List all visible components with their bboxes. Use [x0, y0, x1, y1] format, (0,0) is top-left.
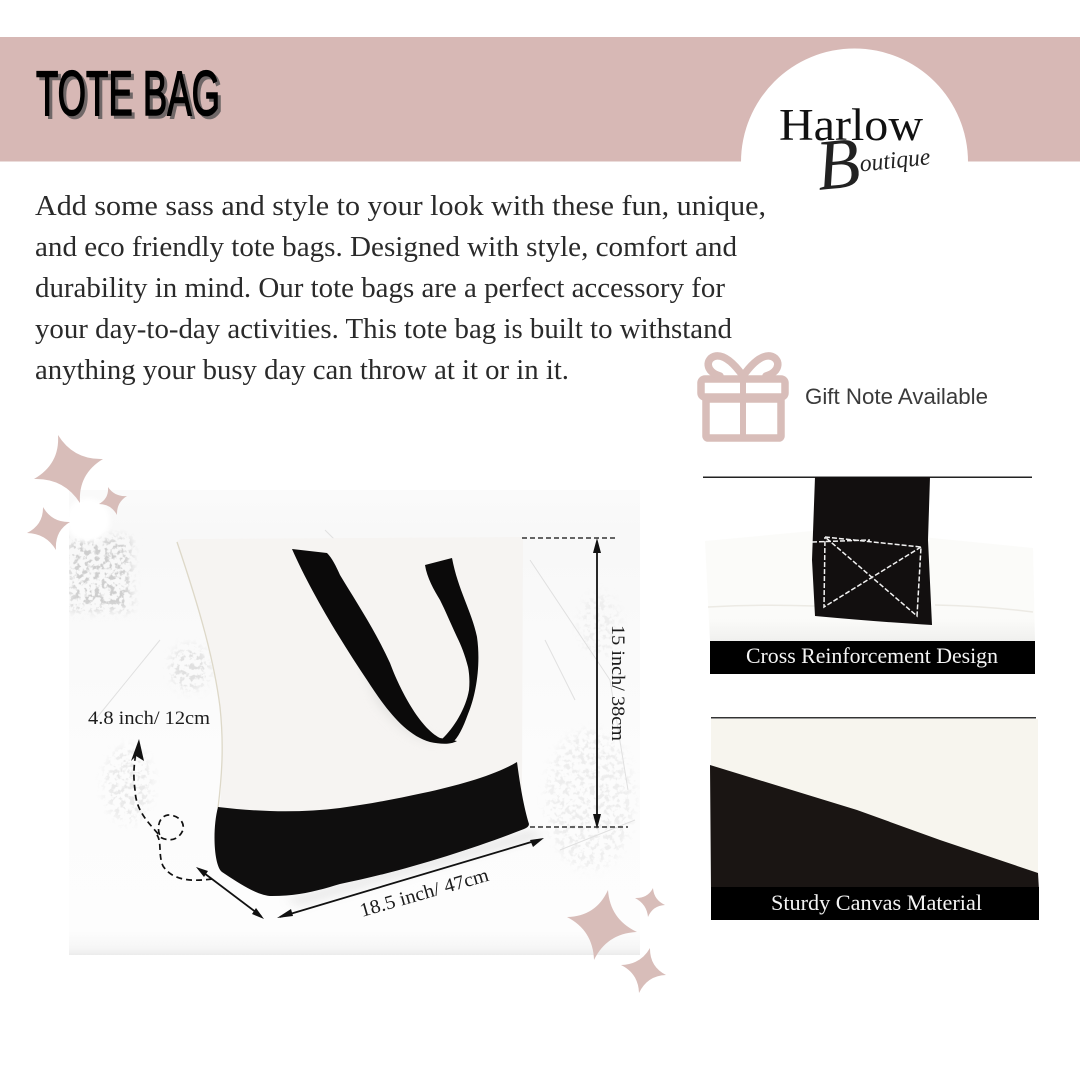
title — [36, 59, 223, 132]
title: TOTE BAG — [36, 59, 220, 129]
description text: Add some sass and style to your look with these fun, unique, — [35, 190, 766, 222]
logo script: B — [812, 122, 864, 206]
panel: sturdy canvas — [710, 717, 1039, 920]
height label: 15 inch/ 38cm — [607, 625, 628, 741]
black strap — [812, 477, 932, 625]
bag — [177, 537, 529, 896]
caption: Cross Reinforcement Design — [746, 643, 998, 668]
fabric fold — [708, 605, 1033, 612]
icon: gift box — [701, 356, 785, 438]
marble background — [69, 490, 640, 955]
logo wordmark: Harlow — [779, 100, 924, 150]
bag left seam — [177, 542, 222, 808]
bag body — [177, 537, 523, 840]
caption — [711, 887, 1039, 920]
description text: durability in mind. Our tote bags are a perfect accessory for — [35, 272, 725, 304]
description text — [35, 190, 766, 386]
bag floor shadow — [285, 830, 545, 905]
dimension: length — [277, 838, 544, 922]
top rule — [711, 717, 1036, 718]
panel: main bag photo — [66, 490, 640, 955]
description text: and eco friendly tote bags. Designed with style, comfort and — [35, 231, 737, 263]
description text: your day-to-day activities. This tote bag is built to withstand — [35, 313, 732, 345]
top rule — [703, 476, 1032, 478]
cross stitching — [812, 537, 921, 616]
gift note label: Gift Note Available — [805, 384, 988, 409]
bag handle right strap — [425, 558, 478, 743]
star small — [635, 888, 665, 917]
canvas cream — [711, 719, 1038, 877]
canvas black — [710, 765, 1039, 890]
fabric — [705, 531, 1035, 641]
dimension: height — [522, 538, 628, 829]
description text: anything your busy day can throw at it or in it. — [35, 354, 569, 386]
title: TOTE BAG — [39, 62, 223, 132]
decorative stars top left — [27, 435, 127, 550]
logo: Harlow Boutique — [741, 48, 968, 206]
header banner — [0, 37, 1080, 162]
panel: cross reinforcement — [703, 476, 1035, 674]
bag shadow under handle — [350, 620, 440, 742]
caption: Sturdy Canvas Material — [771, 890, 982, 915]
dimension: depth — [88, 709, 264, 919]
white halo behind stars — [66, 498, 110, 542]
depth label: 4.8 inch/ 12cm — [88, 709, 211, 729]
caption — [710, 641, 1035, 674]
marble texture — [69, 530, 635, 870]
star small — [99, 487, 127, 515]
bag black base — [215, 762, 529, 896]
star medium — [27, 507, 70, 550]
bag handle left strap — [292, 549, 457, 744]
logo arch — [741, 48, 968, 165]
dashed arrow head — [131, 739, 144, 761]
star medium — [621, 948, 666, 993]
star large — [567, 890, 637, 960]
star large — [34, 435, 103, 503]
length label: 18.5 inch/ 47cm — [358, 865, 491, 922]
dashed looped arrow — [134, 752, 212, 880]
length arrow — [280, 840, 538, 917]
height arrow — [596, 545, 598, 820]
depth arrow — [200, 870, 261, 916]
logo script: outique — [858, 144, 932, 178]
height dashes — [522, 538, 628, 827]
decorative stars bottom right — [567, 888, 666, 993]
